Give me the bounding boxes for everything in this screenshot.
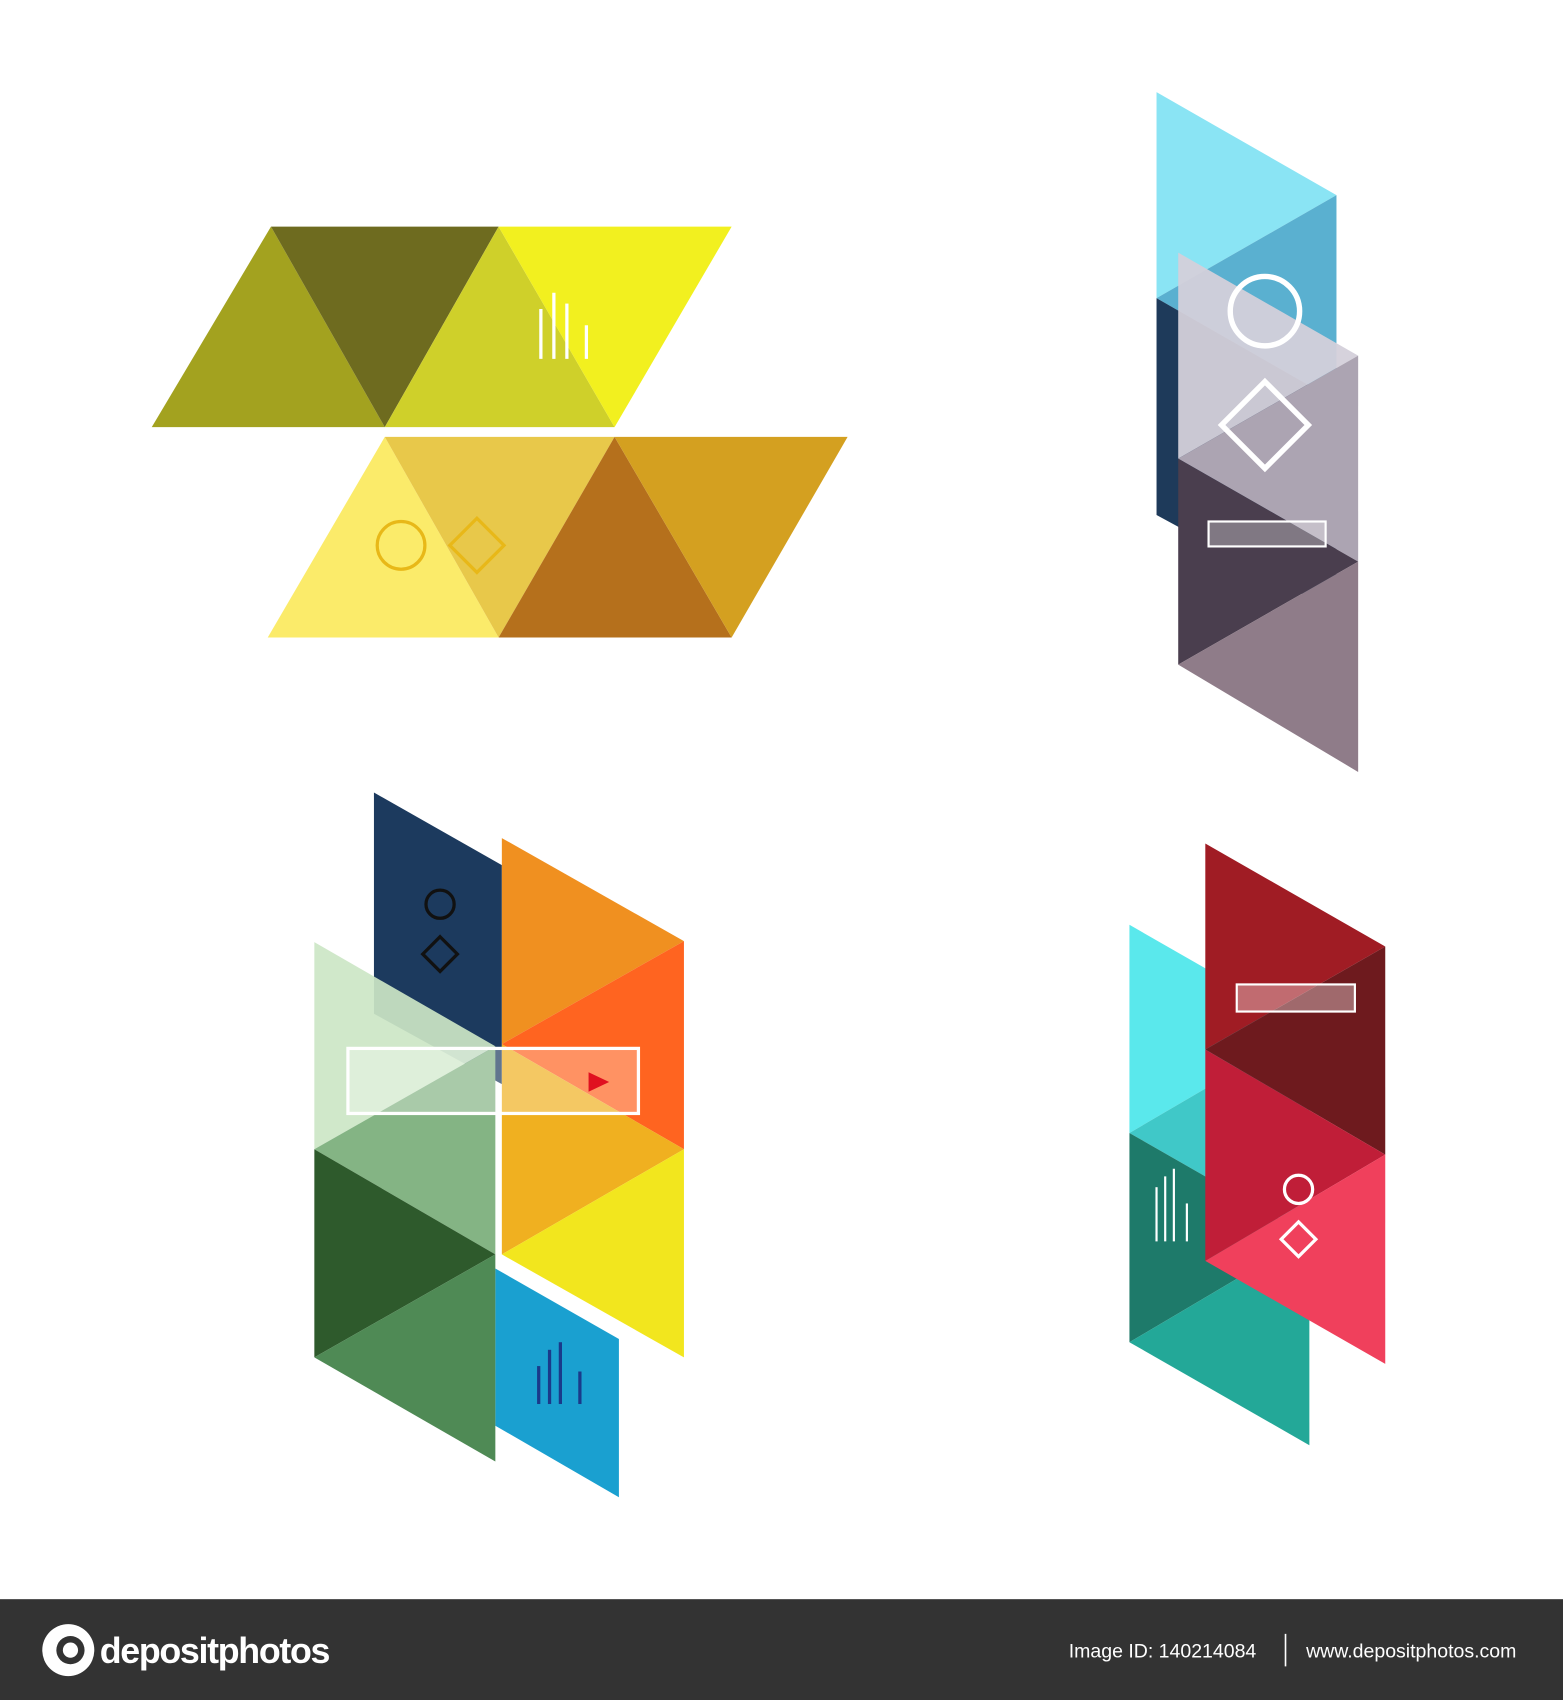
footer [0, 1599, 1563, 1700]
icons: circle diamond bar [1222, 276, 1308, 468]
callout bar [348, 1048, 638, 1113]
icon: blue bars [539, 1342, 580, 1404]
icon: circle and diamond [377, 518, 504, 572]
footer: www.depositphotos.com [1305, 1641, 1516, 1663]
panel: multicolor group [314, 793, 684, 1497]
panel: blue-gray group [1157, 92, 1358, 772]
footer: Image ID: 140214084 [1069, 1641, 1256, 1663]
icon: circle diamond [423, 890, 457, 971]
panel: teal-red group [1129, 843, 1385, 1445]
footer: depositphotos [100, 1631, 330, 1671]
icon: bars [541, 293, 586, 359]
panel: yellow triangles group [152, 227, 848, 638]
